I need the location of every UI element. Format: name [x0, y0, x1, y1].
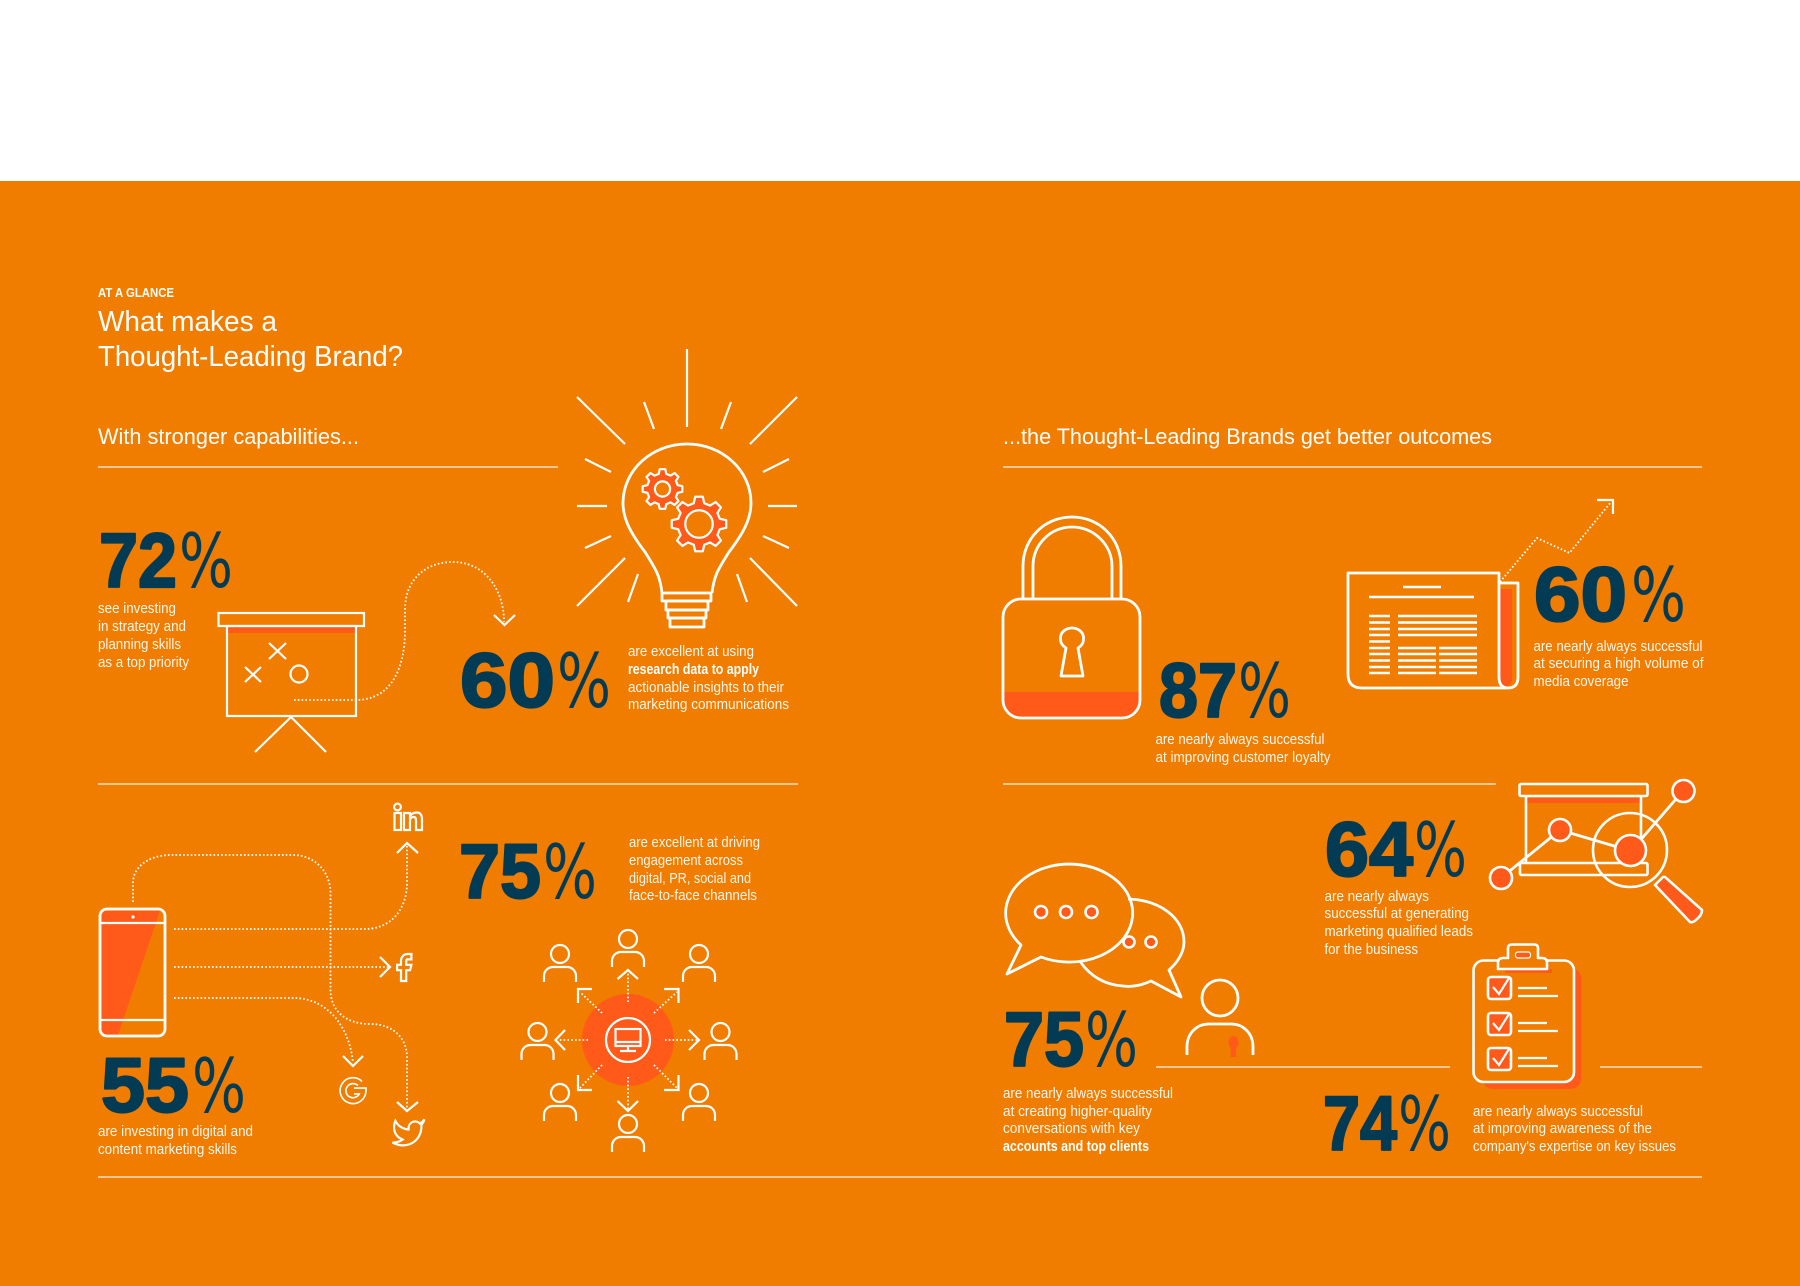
stat: 75% engagement: 75: [459, 829, 541, 915]
text: 87% description: are nearly always successful: [1156, 731, 1324, 748]
text: 87% description: [1156, 731, 1331, 766]
text: 75% engagement description: face-to-face channels: [629, 887, 757, 904]
text: 75% engagement description: [629, 834, 760, 904]
text: 60% research description: actionable insights to their: [628, 679, 784, 696]
stat: 60% research: %: [557, 637, 611, 725]
arrow: rising media coverage: [1500, 500, 1613, 582]
text: 60% research description: research data to apply: [628, 661, 760, 678]
text: 64% description: marketing qualified leads: [1324, 923, 1473, 940]
text: 74% description: are nearly always successful: [1473, 1103, 1643, 1120]
text: 72% description: in strategy and: [98, 618, 186, 635]
text: 74% description: company's expertise on key issues: [1473, 1138, 1676, 1155]
gear: small: [643, 469, 682, 509]
icon: leads chart with magnifier: [1490, 780, 1702, 922]
stat: 87%: 87: [1159, 648, 1237, 734]
icon: twitter: [392, 1119, 424, 1145]
text: 75% engagement description: digital, PR, social and: [629, 870, 751, 887]
icon: smartphone: [100, 909, 165, 1036]
stat: 64%: %: [1414, 806, 1467, 894]
text: 72% description: planning skills: [98, 636, 181, 653]
text: 55% description: content marketing skills: [98, 1141, 237, 1158]
icon: clipboard checklist: [1474, 944, 1582, 1089]
text: 75% engagement description: are excellent at driving: [629, 834, 760, 851]
text: 55% description: [98, 1123, 253, 1158]
stat: 55%: 55: [101, 1043, 189, 1129]
text: 74% description: [1473, 1103, 1676, 1155]
icon: speech bubbles: [1006, 864, 1184, 997]
stat: 75% engagement: %: [543, 828, 597, 916]
text: 60% media description: media coverage: [1534, 673, 1628, 690]
stat: 75% conversations: [1004, 996, 1138, 1084]
title: What makes a: [98, 306, 278, 338]
text: 75% conversations description: accounts and top clients: [1003, 1138, 1149, 1155]
stat: 75% conversations: %: [1085, 996, 1138, 1084]
stat: 75% conversations: 75: [1004, 997, 1084, 1083]
text: 72% description: see investing: [98, 600, 176, 617]
title: [98, 306, 403, 373]
stat: 60% research: 60: [460, 638, 555, 724]
stat: 87%: %: [1238, 647, 1291, 735]
arrow: strategy to research: [294, 562, 515, 700]
icon: presentation board: [218, 613, 364, 752]
stat: 74%: [1323, 1080, 1451, 1168]
icon: linkedin: [394, 804, 422, 830]
stat: 72%: [99, 517, 233, 605]
radiating arrows: [556, 970, 699, 1111]
heading: outcomes: ...the Thought-Leading Brands get better outcomes: [1003, 424, 1492, 449]
stat: 72%: %: [179, 517, 233, 605]
text: 75% conversations description: at creating higher-quality: [1003, 1103, 1152, 1120]
stat: 60% media: [1534, 551, 1686, 639]
heading: capabilities: With stronger capabilities...: [98, 424, 359, 449]
dotted channel lines with arrows: [133, 843, 418, 1111]
title: Thought-Leading Brand?: [98, 341, 403, 373]
text: 64% description: [1324, 888, 1473, 958]
text: 75% engagement description: engagement across: [629, 852, 743, 869]
gear: large: [672, 497, 726, 551]
text: 64% description: successful at generating: [1324, 905, 1469, 922]
stat: 87%: [1159, 647, 1291, 735]
stat: 75% engagement: [459, 828, 597, 916]
stat: 64%: [1325, 806, 1467, 894]
text: 75% conversations description: are nearly always successful: [1003, 1085, 1173, 1102]
text: 64% description: are nearly always: [1324, 888, 1429, 905]
text: 72% description: as a top priority: [98, 654, 189, 671]
text: 60% research description: marketing communications: [628, 696, 789, 713]
icon: facebook: [397, 954, 411, 981]
text: 75% conversations description: conversations with key: [1003, 1120, 1140, 1137]
text: 64% description: for the business: [1324, 941, 1418, 958]
icon: google: [343, 1081, 363, 1101]
eyebrow label: AT A GLANCE: [98, 286, 174, 300]
diagram: audience network: [522, 930, 736, 1152]
people around the hub: [522, 930, 736, 1152]
icon: padlock: [1003, 517, 1140, 718]
icon: newspaper: [1348, 573, 1518, 688]
icon: monitor: [616, 1029, 640, 1051]
text: 60% media description: [1534, 638, 1704, 690]
stat: 60% media: %: [1631, 551, 1686, 639]
text: 60% research description: are excellent at using: [628, 643, 754, 660]
stat: 64%: 64: [1325, 807, 1413, 893]
text: 75% conversations description: [1003, 1085, 1173, 1155]
text: 60% media description: at securing a high volume of: [1534, 655, 1704, 672]
stat: 74%: %: [1398, 1080, 1451, 1168]
stat: 74%: 74: [1323, 1081, 1397, 1167]
text: 87% description: at improving customer loyalty: [1156, 749, 1331, 766]
icon: person with keyhole: [1187, 980, 1253, 1057]
text: 74% description: at improving awareness of the: [1473, 1120, 1652, 1137]
text: 55% description: are investing in digital and: [98, 1123, 253, 1140]
text: 60% research description: [628, 643, 789, 713]
stat: 60% media: 60: [1534, 552, 1627, 638]
text: 72% description: [98, 600, 189, 671]
icon: light bulb with gears: [577, 349, 797, 627]
stat: 55%: %: [192, 1042, 246, 1130]
text: 60% media description: are nearly always successful: [1534, 638, 1702, 655]
stat: 55%: [101, 1042, 246, 1130]
stat: 72%: 72: [99, 518, 177, 604]
stat: 60% research: [460, 637, 611, 725]
